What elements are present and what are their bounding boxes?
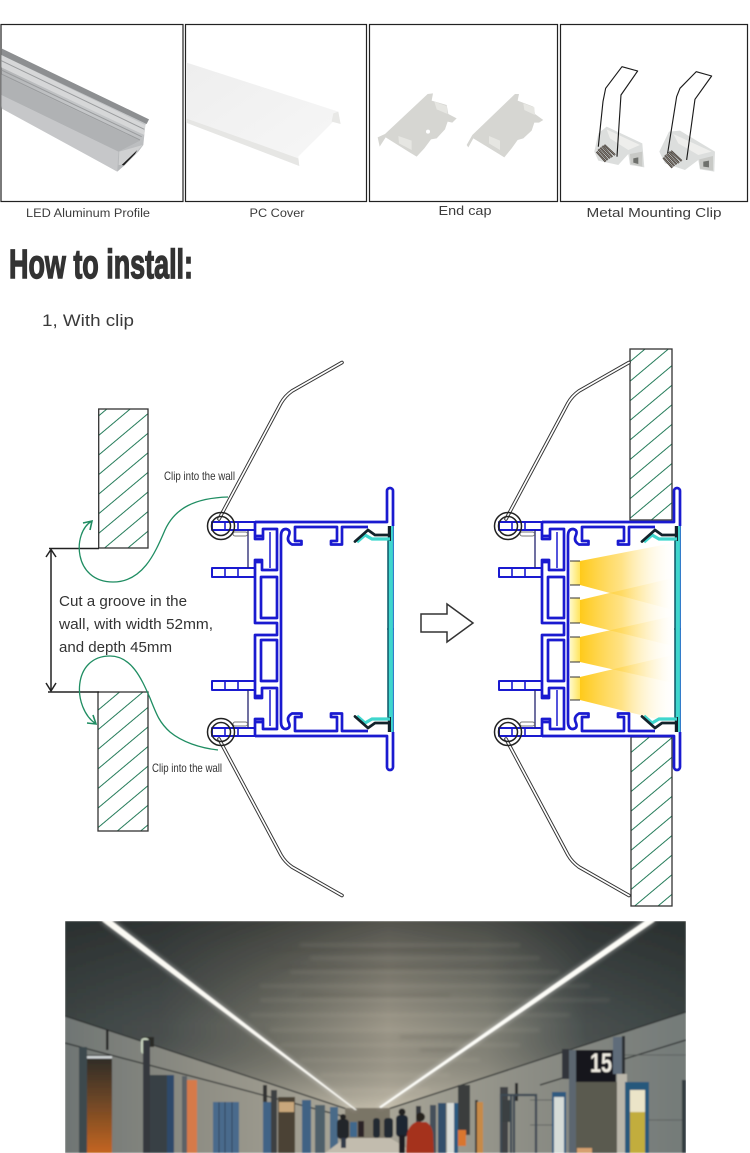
right wall: [385, 1012, 686, 1153]
image: mounting clips: [594, 67, 715, 172]
caption: Metal Mounting Clip: Metal Mounting Clip: [586, 206, 722, 220]
panel: end cap: [370, 24, 558, 202]
photo: installed corridor lighting: [65, 921, 686, 1153]
person in red jacket: [406, 1112, 434, 1153]
text: groove instructions: wall, with width 52mm,: [58, 616, 213, 633]
LED chips: [570, 561, 580, 700]
linear lights: [100, 921, 657, 1110]
label: clip into the wall, bottom: Clip into the wall: [152, 761, 222, 775]
heading: How to install: How to install:: [9, 241, 193, 287]
wall section: upper right: [630, 349, 672, 520]
ceiling: [65, 921, 686, 1109]
sign: gate 15: [576, 1048, 616, 1082]
caption: End cap: End cap: [438, 204, 492, 218]
text: groove instructions: and depth 45mm: [59, 639, 172, 656]
left wall: [65, 1016, 350, 1153]
arrow: before to after: [421, 604, 473, 642]
green arrow: lower clip: [79, 656, 218, 750]
panel: groove diagram: [46, 362, 393, 896]
panel: LED aluminum profile: [1, 24, 183, 202]
image: aluminum profile: [1, 48, 149, 172]
sign: gate 15: 15: [590, 1048, 612, 1078]
image: PC cover: [186, 62, 341, 166]
wall section: upper left: [99, 409, 148, 548]
wall section: lower right: [631, 737, 672, 906]
image: end caps: [378, 93, 543, 157]
text: groove instructions: Cut a groove in the: [59, 593, 187, 610]
subheading: With clip: 1, With clip: [42, 311, 134, 330]
ceiling far end and floor: [325, 1108, 415, 1153]
dimension arrow: groove width: [46, 548, 99, 692]
caption: LED Aluminum Profile: LED Aluminum Profile: [26, 208, 150, 220]
panel: metal mounting clip: [560, 24, 748, 202]
text: groove instructions: [58, 593, 213, 656]
shops near the far end: [416, 1085, 483, 1153]
green arrow: upper clip: [79, 497, 228, 582]
light beams: [580, 543, 673, 723]
profile cross-section: installed: [494, 362, 680, 896]
profile cross-section: before install: [208, 362, 393, 896]
label: clip into the wall, top: Clip into the wall: [164, 469, 235, 483]
people in the corridor: [337, 1108, 434, 1153]
panel: PC cover: [186, 24, 366, 202]
wall section: lower left: [98, 692, 148, 831]
caption: PC Cover: PC Cover: [250, 206, 305, 220]
panel: installed diagram: [494, 349, 680, 906]
